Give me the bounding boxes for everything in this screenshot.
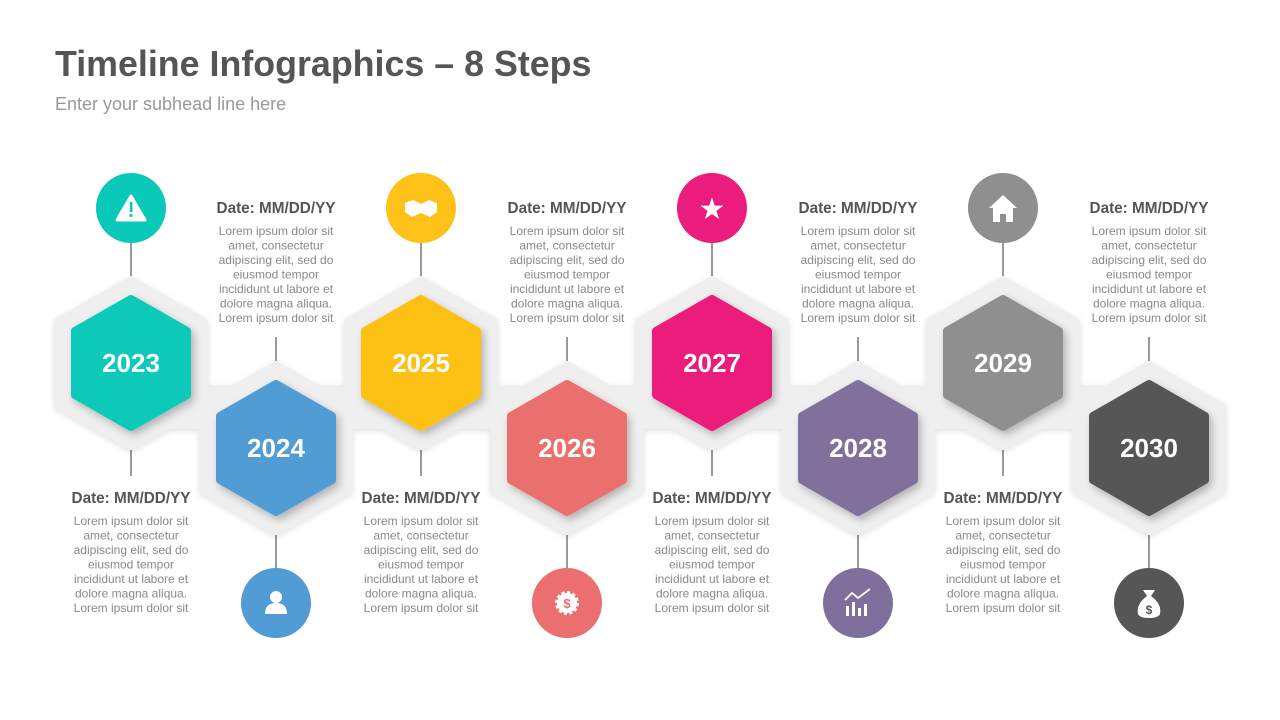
connector lines — [131, 243, 1149, 568]
step 2029 — [944, 173, 1062, 615]
step 2027: 2027 — [683, 348, 741, 378]
step 2027 — [653, 173, 771, 615]
title: Timeline Infographics – 8 Steps — [55, 44, 591, 84]
step 2028: 2028 — [829, 433, 887, 463]
step 2027: ★ — [699, 192, 725, 227]
step 2030: $ — [1146, 603, 1153, 617]
step 2030 — [1090, 200, 1208, 638]
step 2025: 2025 — [392, 348, 450, 378]
step 2029: 2029 — [974, 348, 1032, 378]
step 2023: 2023 — [102, 348, 160, 378]
step 2025 — [362, 173, 480, 615]
step 2026: 2026 — [538, 433, 596, 463]
step 2024: 2024 — [247, 433, 305, 463]
hexagon band background — [57, 279, 1223, 532]
step 2024 — [217, 200, 335, 638]
step 2026 — [508, 200, 626, 638]
step 2030: 2030 — [1120, 433, 1178, 463]
step 2023 — [72, 173, 190, 615]
step 2026: $ — [563, 596, 571, 611]
subtitle: Enter your subhead line here — [55, 94, 286, 114]
step 2028 — [799, 200, 917, 638]
